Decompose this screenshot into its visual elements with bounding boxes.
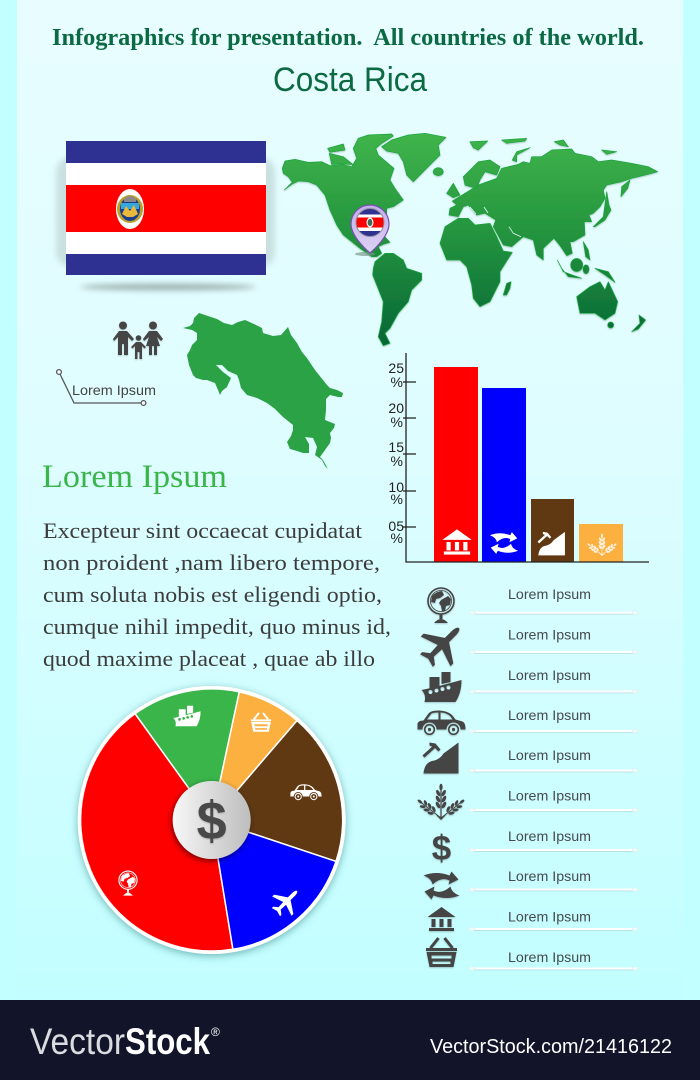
row 3: ship: Lorem Ipsum xyxy=(508,667,591,683)
row 6: wheat: Lorem Ipsum xyxy=(508,788,591,804)
Indonesia and Philippines xyxy=(557,260,582,278)
body paragraph: cum soluta nobis est eligendi optio, xyxy=(43,582,382,607)
Scandinavia xyxy=(463,160,500,188)
bar icons xyxy=(442,529,618,558)
Japan xyxy=(593,192,611,227)
row 7: dollar: Lorem Ipsum xyxy=(508,828,591,844)
slice: red xyxy=(81,714,233,951)
axis labels: % xyxy=(391,491,403,507)
row 9: bank: Lorem Ipsum xyxy=(508,908,591,924)
row 9: bank xyxy=(428,907,638,931)
pie chart xyxy=(78,686,346,954)
man xyxy=(113,322,134,355)
row 5: mining xyxy=(424,742,638,774)
axis labels: % xyxy=(391,374,403,390)
body paragraph: cumque nihil impedit, quo minus id, xyxy=(43,614,391,639)
footer image id: VectorStock.com/21416122 xyxy=(430,1036,672,1058)
axis labels xyxy=(388,360,404,546)
axis labels: 05 xyxy=(388,518,404,534)
Arctic Canada islands xyxy=(328,144,345,152)
row 8: exchange xyxy=(424,868,638,900)
North America xyxy=(282,134,403,257)
axis labels: 25 xyxy=(388,360,404,376)
bars xyxy=(434,367,623,562)
country name heading: Costa Rica xyxy=(273,61,427,99)
footer logo xyxy=(30,1021,220,1062)
row 3: ship xyxy=(422,667,638,702)
row 10: basket xyxy=(426,938,638,970)
Greenland xyxy=(382,133,446,182)
bar chart xyxy=(388,353,649,562)
row 5: mining: Lorem Ipsum xyxy=(508,747,591,763)
body paragraph xyxy=(43,518,391,671)
footer logo: Stock xyxy=(125,1021,210,1062)
row 1: globe xyxy=(428,586,638,623)
row 2: plane: Lorem Ipsum xyxy=(508,626,591,642)
icon list xyxy=(412,586,638,970)
gulf lines xyxy=(470,207,521,237)
row 7: dollar: $ xyxy=(432,829,451,868)
Kamchatka xyxy=(621,180,630,197)
family icon xyxy=(113,322,163,359)
Australia xyxy=(577,282,618,320)
flag of Costa Rica xyxy=(56,141,275,290)
body paragraph: non proident ,nam libero tempore, xyxy=(43,550,380,575)
South America xyxy=(373,253,422,346)
axis labels: 15 xyxy=(388,439,404,455)
axis labels: % xyxy=(391,530,403,546)
centre hub with dollar sign: $ xyxy=(197,791,227,851)
Great Britain xyxy=(447,183,460,198)
Tasmania and New Zealand xyxy=(608,322,614,328)
row 2: plane xyxy=(412,613,638,675)
row 7: dollar xyxy=(432,828,638,868)
flag emblem xyxy=(116,189,144,229)
row 10: basket: Lorem Ipsum xyxy=(508,949,591,965)
callout: Lorem Ipsum label with connector xyxy=(57,370,156,405)
slice: orange xyxy=(212,692,297,820)
body paragraph: quod maxime placeat , quae ab illo xyxy=(43,646,375,671)
row 4: car: Lorem Ipsum xyxy=(508,707,591,723)
world map xyxy=(282,133,658,346)
Arctic islands xyxy=(470,141,488,150)
footer logo: ® xyxy=(211,1025,220,1039)
map pin with flag xyxy=(351,205,389,256)
Iceland xyxy=(433,168,443,176)
text block heading: Lorem Ipsum xyxy=(42,459,227,495)
footer bar xyxy=(0,1000,700,1080)
slice: brown xyxy=(212,721,343,861)
axis labels: 20 xyxy=(388,400,404,416)
centre hub with dollar sign xyxy=(173,781,251,859)
footer logo: Vector xyxy=(30,1021,125,1062)
woman xyxy=(143,322,163,355)
slice: blue xyxy=(212,820,336,949)
row 8: exchange: Lorem Ipsum xyxy=(508,868,591,884)
row 4: car xyxy=(418,707,638,734)
axis labels: 10 xyxy=(388,479,404,495)
child xyxy=(131,335,146,359)
slice icons xyxy=(119,706,322,922)
axis labels: % xyxy=(391,453,403,469)
title: Infographics for presentation. All countries of the world. xyxy=(52,25,644,51)
body paragraph: Excepteur sint occaecat cupidatat xyxy=(43,518,362,543)
callout: Lorem Ipsum label with connector: Lorem Ipsum xyxy=(72,382,156,398)
row 1: globe: Lorem Ipsum xyxy=(508,586,591,602)
axes xyxy=(403,353,649,562)
row 6: wheat xyxy=(415,784,638,822)
axis labels: % xyxy=(391,414,403,430)
Eurasia xyxy=(449,149,658,260)
Madagascar xyxy=(503,282,511,295)
slice: green xyxy=(135,689,239,820)
map of Costa Rica xyxy=(183,313,343,469)
Africa xyxy=(440,218,512,307)
